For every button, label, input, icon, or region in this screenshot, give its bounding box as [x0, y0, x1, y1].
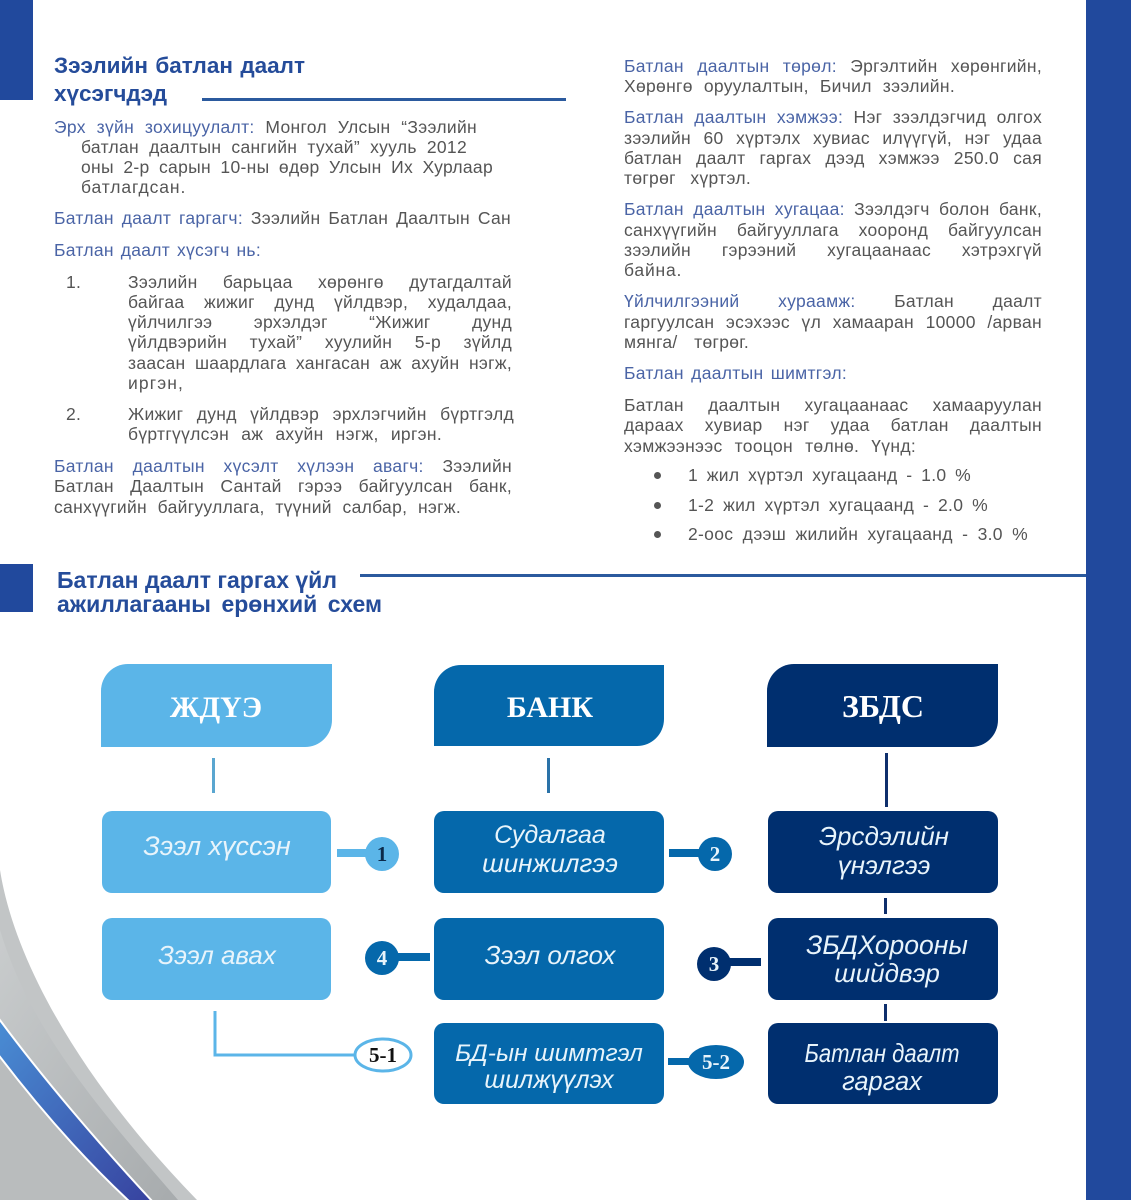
text block: left column: [54, 117, 514, 517]
box: risk assessment: үнэлгээ: [838, 850, 931, 880]
box: loan requested: Зээл хүссэн: [143, 831, 291, 861]
header: ЖДҮЭ: ЖДҮЭ: [170, 691, 262, 724]
text: 1-2 жил хүртэл хугацаанд - 2.0 %: [688, 495, 988, 515]
step 5-1 badge: 5-1: [369, 1043, 397, 1067]
text: бүртгүүлсэн аж ахуйн нэгж, иргэн.: [128, 424, 442, 444]
text: Зээлийн батлан даалт: [54, 53, 305, 78]
step 1 badge: 1: [377, 842, 387, 866]
text: 1.: [66, 272, 81, 292]
text: Хөрөнгө оруулалтын, Бичил зээлийн.: [624, 76, 955, 96]
heading rule: [202, 98, 566, 101]
text: Батлан даалтын төрөл: Эргэлтийн хөрөнгийн,: [624, 56, 1042, 76]
text: ажиллагааны ерөнхий схем: [57, 591, 382, 617]
text: санхүүгийн байгууллага хооронд байгуулсан: [624, 220, 1042, 240]
top left accent block: [0, 0, 33, 100]
text: дараах хувиар нэг удаа батлан даалтын: [624, 415, 1042, 435]
text: батлагдсан.: [81, 177, 186, 197]
column connectors: [212, 753, 888, 1021]
text: батлан даалтын сангийн тухай” хууль 2012: [81, 137, 467, 157]
box: grant loan: Зээл олгох: [485, 940, 616, 970]
box: research analysis: Судалгаа: [494, 821, 606, 849]
list: fee rates: [654, 465, 1028, 544]
text: Батлан даалт гаргах үйл: [57, 567, 337, 593]
step 5-2 badge: 5-2: [702, 1050, 730, 1074]
text: Жижиг дунд үйлдвэр эрхлэгчийн бүртгэлд: [128, 404, 514, 424]
box: take loan: [102, 918, 331, 1000]
box: transfer fee: [434, 1023, 664, 1104]
text: Батлан даалтын хугацаа: Зээлдэгч болон банк,: [624, 199, 1042, 219]
section rule: [360, 574, 1086, 577]
text: үйлчилгээ эрхэлдэг “Жижиг дунд: [128, 312, 512, 332]
step 3 badge: 3: [709, 952, 719, 976]
step 1 badge: [337, 837, 399, 871]
text: Батлан даалтын хугацаанаас хамааруулан: [624, 395, 1042, 415]
text: Батлан Даалтын Сантай гэрээ байгуулсан банк,: [54, 476, 512, 496]
text: хэмжээнээс тооцон төлнө. Үүнд:: [624, 436, 916, 456]
text: Үйлчилгээний хураамж: Батлан даалт: [624, 291, 1042, 311]
box: grant loan: [434, 918, 664, 1000]
text: гаргуулсан эсэхээс үл хамааран 10000 /арван: [624, 312, 1042, 332]
text: Батлан даалтын шимтгэл:: [624, 363, 847, 383]
text: төгрөг хүртэл.: [624, 168, 751, 188]
text: оны 2-р сарын 10-ны өдөр Улсын Их Хурлаар: [81, 157, 493, 177]
box: loan requested: [102, 811, 331, 893]
box: committee decision: шийдвэр: [834, 958, 940, 988]
text: Батлан даалт гаргагч: Зээлийн Батлан Даалтын Сан: [54, 208, 511, 228]
text: зээлийн гэрээний хугацаанаас хэтрэхгүй: [624, 240, 1042, 260]
box: take loan: Зээл авах: [158, 940, 277, 970]
header: ЖДҮЭ: [101, 664, 332, 747]
box: issue guarantee: гаргах: [842, 1068, 923, 1096]
text: 2.: [66, 404, 81, 424]
box: transfer fee: шилжүүлэх: [484, 1066, 615, 1094]
text: батлан даалт гаргах дээд хэмжээ 250.0 сая: [624, 148, 1042, 168]
box: research analysis: [434, 811, 664, 893]
step 2 badge: 2: [710, 842, 720, 866]
header: БАНК: БАНК: [507, 691, 593, 724]
box: committee decision: ЗБДХорооны: [806, 930, 968, 960]
box: transfer fee: БД-ын шимтгэл: [455, 1040, 643, 1067]
text: Батлан даалтын хэмжээ: Нэг зээлдэгчид олгох: [624, 107, 1042, 127]
box: committee decision: [768, 918, 998, 1000]
text: үйлдвэрийн тухай” хуулийн 5-р зүйлд: [128, 332, 512, 352]
box: issue guarantee: [768, 1023, 998, 1104]
text: зээлийн 60 хүртэлх хувиас илүүгүй, нэг удаа: [624, 128, 1042, 148]
heading: general scheme of guarantee operations: [57, 567, 382, 617]
step 5-2 badge: [668, 1045, 744, 1079]
step 5-1 badge: [215, 1011, 411, 1071]
box: risk assessment: [768, 811, 998, 893]
heading: loan guarantee for applicants: [54, 53, 305, 106]
right side bar: [1086, 0, 1131, 1200]
box: research analysis: шинжилгээ: [482, 848, 618, 878]
header: ЗБДС: ЗБДС: [842, 688, 924, 724]
box: risk assessment: Эрсдэлийн: [819, 821, 949, 851]
text: 2-оос дээш жилийн хугацаанд - 3.0 %: [688, 524, 1028, 544]
step 3 badge: [697, 947, 761, 981]
header: БАНК: [434, 665, 664, 746]
text block: right column: [624, 56, 1042, 456]
section accent block: [0, 564, 33, 612]
step 4 badge: [365, 941, 430, 975]
text: Батлан даалтын хүсэлт хүлээн авагч: Зээлийн: [54, 456, 512, 476]
box: issue guarantee: Батлан даалт: [804, 1038, 960, 1068]
header: ЗБДС: [767, 664, 998, 747]
text: 1 жил хүртэл хугацаанд - 1.0 %: [688, 465, 971, 485]
text: заасан шаардлага хангасан аж ахуйн нэгж,: [128, 353, 512, 373]
text: байна.: [624, 260, 682, 280]
text: иргэн,: [128, 373, 184, 393]
text: Эрх зүйн зохицуулалт: Монгол Улсын “Зээлийн: [54, 117, 477, 137]
text: байгаа жижиг дунд үйлдвэр, худалдаа,: [128, 292, 512, 312]
text: Батлан даалт хүсэгч нь:: [54, 240, 261, 260]
step 2 badge: [669, 837, 732, 871]
step 4 badge: 4: [377, 946, 388, 970]
text: мянга/ төгрөг.: [624, 332, 749, 352]
text: хүсэгчдэд: [54, 81, 167, 106]
text: санхүүгийн байгууллага, түүний салбар, нэгж.: [54, 497, 461, 517]
text: Зээлийн барьцаа хөрөнгө дутагдалтай: [128, 272, 512, 292]
